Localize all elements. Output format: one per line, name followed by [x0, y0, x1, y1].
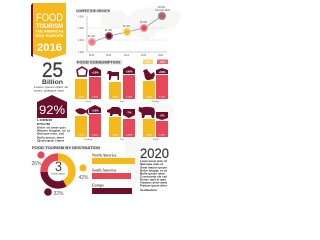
- text block: 2020 forecast: Nulla ipsum amet: [140, 172, 165, 176]
- destination bar: europe: Europe: [92, 184, 104, 188]
- text block: lorem ipsum: [37, 118, 70, 142]
- text block: 2020 forecast: [140, 160, 168, 192]
- destination bar: north america: [92, 154, 135, 164]
- bars: grain: 2,000t: [78, 96, 84, 98]
- donut centre label: 3: [55, 158, 62, 174]
- bars: poultry: [143, 68, 168, 103]
- heading: food consumption: [76, 60, 122, 65]
- line chart: $1,500: [105, 30, 113, 32]
- stat: 25 billion: [34, 59, 68, 92]
- text block: 2020 forecast: Lorem ipsum dolor sit: [140, 160, 167, 163]
- text block: lorem ipsum: IPSUM: [37, 122, 51, 126]
- text block: 2020 forecast: Amet mauris ipsum: [140, 166, 168, 170]
- bars: beef: 1,500t: [112, 96, 118, 98]
- line chart: [78, 7, 170, 57]
- line chart: 1,000: [78, 52, 84, 54]
- donut callout: 32 percent: 32%: [53, 191, 64, 197]
- text block: 2020 forecast: Quisque nam et: [140, 163, 163, 166]
- line chart: 2020: [158, 55, 164, 57]
- bars: beef: Beef: [120, 101, 125, 103]
- donut centre label: [51, 158, 65, 176]
- text block: 2020 forecast: Pretium ipsum dolor: [140, 184, 167, 188]
- text block: lorem ipsum: Dolor sit amet quis: [37, 126, 67, 130]
- title banner: [31, 3, 66, 59]
- bars: pork: Pork: [120, 138, 125, 141]
- bars: beef: 2,100t: [126, 96, 132, 98]
- text block: lorem ipsum: Quisque nam: [37, 140, 64, 142]
- stat: 2020: 2020: [140, 146, 169, 161]
- bars: lamb: [138, 107, 168, 141]
- stat: 92 percent badge: 92%: [39, 103, 65, 117]
- line chart: 2012: [89, 55, 95, 57]
- heading: food tourism by destination: FOOD TOURISM BY DESTINATION: [32, 146, 101, 150]
- bars: lamb: -5%: [160, 114, 165, 118]
- line chart: 4,000: [78, 16, 84, 18]
- title banner: 2016: [37, 42, 62, 54]
- text block: lorem ipsum: Mauris feugiat, ex ut: [37, 130, 70, 132]
- destination bar: north america: North America: [92, 154, 116, 158]
- donut callout: 42 percent: [78, 164, 89, 181]
- text block: lorem ipsum: Quisque nam, sed: [37, 132, 65, 136]
- bars: pork: -7%: [127, 110, 132, 114]
- stat: 25 billion: Lorem ipsum dolor sit: [34, 85, 68, 89]
- bars: pork: [107, 107, 135, 141]
- stat: 25 billion: Billion: [42, 80, 63, 86]
- line chart: $2,000: [123, 26, 131, 28]
- bars: beef: +30%: [125, 70, 133, 74]
- title banner: TOURISM: [36, 24, 63, 30]
- background world map: [100, 5, 182, 190]
- stat: 92 percent badge: [37, 95, 67, 118]
- stat: 25 billion: 25: [42, 59, 63, 82]
- bars: poultry: 1,700t: [159, 96, 165, 98]
- destination bar: south america: South America: [92, 168, 116, 172]
- line chart: 2013: [106, 55, 112, 57]
- bars: fish: Seafood: [84, 139, 93, 141]
- line chart: $4,000: [158, 7, 166, 9]
- bars: fish: [75, 105, 101, 141]
- bars: lamb: 1,600t: [146, 134, 152, 136]
- bars: poultry: +32%: [158, 70, 166, 74]
- line chart: Forecast 2020: [155, 9, 170, 12]
- bars: grain: [75, 67, 101, 103]
- text block: 2020 forecast: Vestibulum: [140, 189, 158, 192]
- line chart: $1,000: [88, 36, 96, 38]
- destination bar: europe: [92, 184, 132, 194]
- text block: 2020 forecast: Donec nam et quis: [140, 178, 167, 182]
- bars: fish: 2,500t: [92, 134, 98, 136]
- line chart: 2015: [141, 55, 147, 57]
- bars: pork: 1,800t: [126, 134, 132, 136]
- title banner: AND EUROPE: [36, 34, 64, 38]
- donut callout: 42 percent: 42%: [78, 175, 89, 181]
- text block: 2020 forecast: Vivamus dolor amet: [140, 182, 167, 184]
- bars: poultry: 1,300t: [146, 96, 152, 98]
- text block: 2020 forecast: Consectetur elit sed: [140, 176, 168, 178]
- bars: fish: 2,100t: [78, 134, 84, 136]
- donut callout: 26 percent: 26%: [31, 161, 42, 167]
- line chart: 3,000: [78, 28, 84, 30]
- donut callout: 26 percent: [31, 151, 45, 167]
- bars: poultry: Poultry: [152, 100, 160, 103]
- text block: lorem ipsum: Nulla ipsum, amet: [37, 136, 64, 140]
- bars: beef: [107, 66, 135, 103]
- bars: grain: Cereal: [85, 100, 92, 103]
- heading: competitive growth: COMPETITIVE GROWTH: [76, 9, 110, 13]
- legend: years: 2015: [146, 62, 151, 64]
- bars: grain: 2,600t: [92, 96, 98, 98]
- bars: grain: +18%: [91, 70, 99, 74]
- line chart: 2,000: [78, 40, 84, 42]
- line chart: $2,500: [140, 22, 148, 24]
- text block: 2020 forecast: Dolor feugiat, ex ut: [140, 170, 167, 172]
- bars: lamb: 1,500t: [159, 134, 165, 136]
- destination bar: south america: [92, 168, 131, 179]
- bars: lamb: Lamb: [153, 139, 159, 141]
- legend: years: 2020: [160, 62, 166, 64]
- heading: food consumption: FOOD CONSUMPTION: [77, 61, 121, 65]
- donut callout: 32 percent: [44, 188, 64, 197]
- bars: pork: 1,900t: [112, 134, 118, 136]
- title banner: THE AMERICAS: [36, 30, 64, 34]
- stat: 25 billion: amet, quisque nam: [34, 88, 64, 92]
- donut centre label: Lorem ipsum: [51, 172, 65, 176]
- bars: fish: +18%: [91, 108, 99, 112]
- title banner: FOOD: [36, 12, 63, 24]
- donut chart: [44, 157, 72, 185]
- legend: years: [143, 60, 168, 64]
- text block: lorem ipsum: LOREM: [37, 118, 53, 122]
- line chart: 2014: [124, 55, 130, 57]
